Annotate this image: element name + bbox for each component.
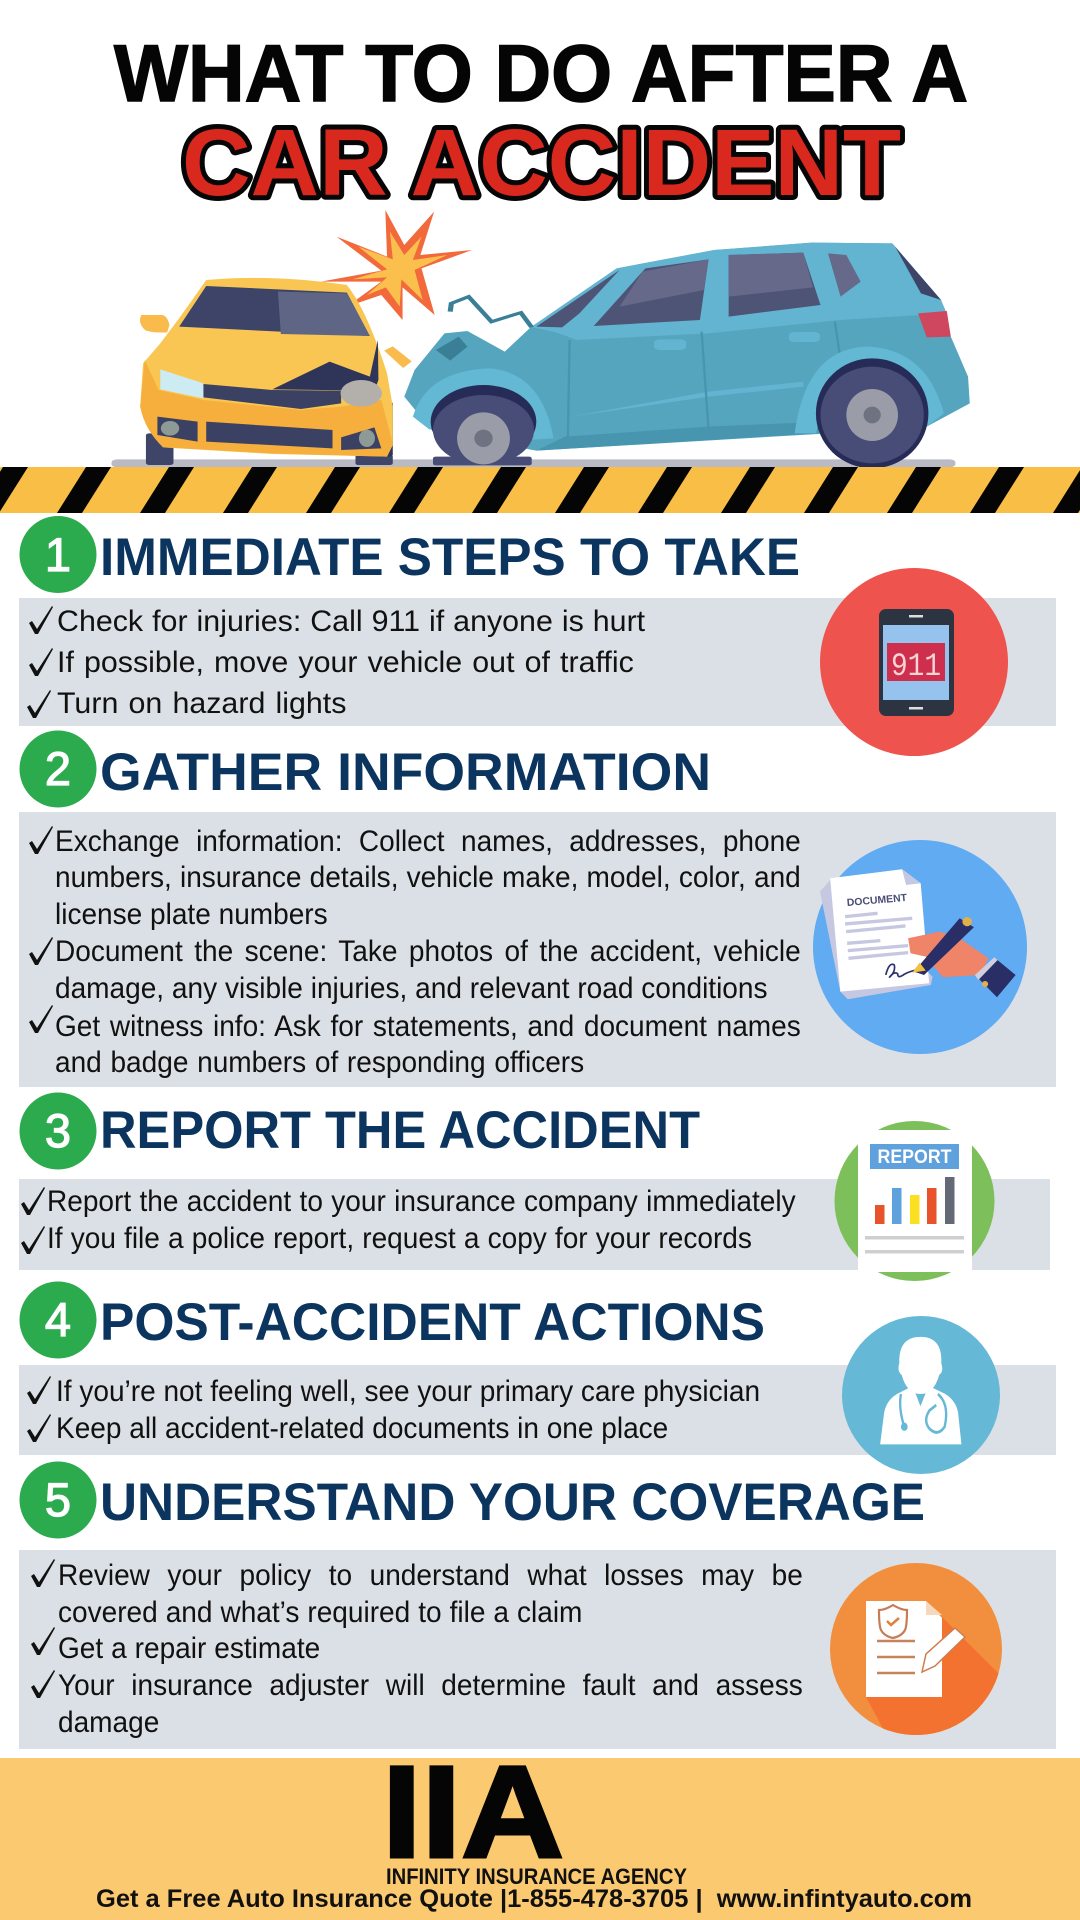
icon: report chart: REPORT: [878, 1147, 952, 1168]
step 4 heading: POST-ACCIDENT ACTIONS: [100, 1293, 765, 1352]
hazard stripe band: [0, 467, 1080, 513]
step 5 heading: [20, 1462, 925, 1538]
panel: gather information: numbers, insurance details, vehicle make, model, color, and: [55, 861, 801, 894]
blue car: [404, 243, 970, 468]
panel: immediate steps: If possible, move your vehicle out of traffic: [57, 646, 634, 679]
icon: signing document: [813, 840, 1027, 1054]
ground shadow: [111, 459, 955, 467]
panel: gather information: and badge numbers of responding officers: [55, 1046, 584, 1079]
step 5 heading: 5: [45, 1473, 71, 1526]
panel: report the accident: [19, 1179, 1050, 1270]
icon: doctor: [842, 1316, 1000, 1474]
step 3 heading: 3: [45, 1104, 71, 1157]
panel: understand your coverage: Review your policy to understand what losses may be: [58, 1559, 803, 1592]
icon: report chart: [834, 1121, 994, 1281]
panel: post-accident actions: If you’re not feeling well, see your primary care physician: [56, 1375, 760, 1408]
illustration: car crash: [111, 210, 970, 468]
front wheel: [431, 385, 536, 458]
step 4 heading: 4: [45, 1293, 71, 1346]
panel: report the accident: If you file a police report, request a copy for your records: [47, 1222, 752, 1255]
yellow car: [140, 278, 412, 465]
step 3 heading: REPORT THE ACCIDENT: [100, 1101, 700, 1160]
footer band: Get a Free Auto Insurance Quote |1-855-478-3705 | www.infintyauto.com: [96, 1885, 972, 1913]
title: what to do after a: WHAT TO DO AFTER A: [114, 29, 968, 119]
icon: phone 911: 911: [891, 648, 941, 685]
panel: understand your coverage: Get a repair estimate: [58, 1632, 320, 1665]
icon: policy document and pen: [830, 1563, 1002, 1735]
icon: impact star: [321, 210, 472, 320]
step 1 heading: IMMEDIATE STEPS TO TAKE: [100, 528, 800, 587]
footer band: [0, 1738, 1080, 1920]
panel: understand your coverage: covered and what’s required to file a claim: [58, 1596, 582, 1629]
panel: understand your coverage: Your insurance adjuster will determine fault and assess: [58, 1669, 803, 1702]
panel: gather information: Document the scene: Take photos of the accident, vehicle: [55, 935, 801, 968]
icon: phone 911: [820, 568, 1008, 756]
footer band: INFINITY INSURANCE AGENCY: [386, 1864, 687, 1889]
step 2 heading: 2: [45, 742, 71, 795]
panel: immediate steps: Turn on hazard lights: [57, 687, 346, 720]
panel: gather information: license plate numbers: [55, 898, 328, 931]
step 2 heading: [20, 730, 711, 808]
rear wheel: [816, 358, 928, 468]
panel: gather information: Get witness info: Ask for statements, and document names: [55, 1010, 801, 1043]
panel: gather information: Exchange information: Collect names, addresses, phone: [55, 825, 801, 858]
wheel arches: [413, 368, 554, 440]
step 2 heading: GATHER INFORMATION: [100, 743, 711, 802]
panel: understand your coverage: [19, 1550, 1056, 1749]
panel: post-accident actions: [19, 1365, 1056, 1455]
panel: report the accident: Report the accident to your insurance company immediately: [47, 1185, 796, 1218]
step 4 heading: [20, 1282, 765, 1358]
step 5 heading: UNDERSTAND YOUR COVERAGE: [100, 1473, 925, 1532]
panel: gather information: [19, 812, 1056, 1087]
panel: immediate steps: [19, 598, 1056, 726]
panel: gather information: damage, any visible injuries, and relevant road conditions: [55, 972, 768, 1005]
crumpled hood line: [450, 297, 532, 327]
icon: signing document: DOCUMENT: [846, 893, 908, 909]
panel: immediate steps: Check for injuries: Call 911 if anyone is hurt: [57, 605, 645, 638]
panel: understand your coverage: damage: [58, 1706, 159, 1739]
title: car accident: CAR ACCIDENT: [182, 110, 901, 216]
footer band: IIA: [382, 1738, 564, 1885]
step 1 heading: [20, 516, 800, 593]
step 1 heading: 1: [45, 528, 71, 581]
panel: post-accident actions: Keep all accident-related documents in one place: [56, 1412, 668, 1445]
step 3 heading: [20, 1092, 700, 1170]
